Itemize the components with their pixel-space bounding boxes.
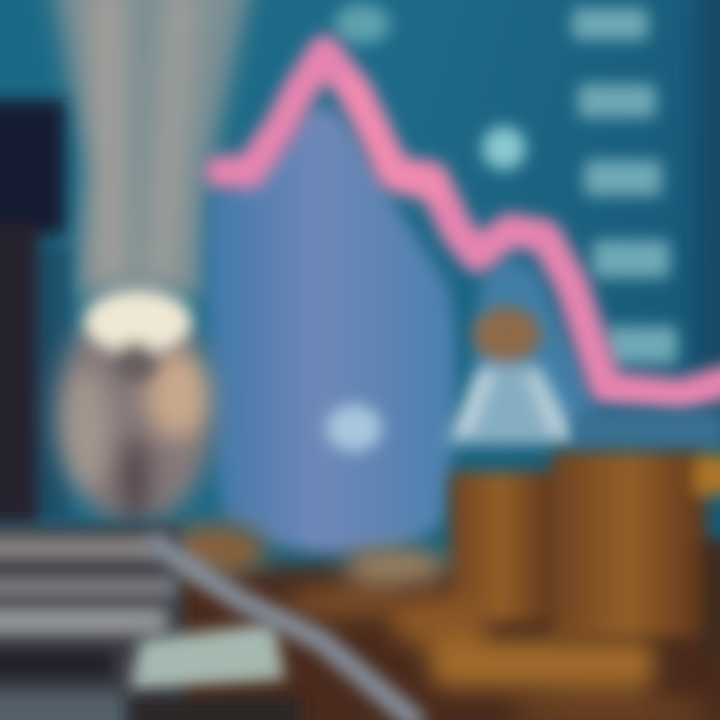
glowing dots in chart [334, 4, 526, 170]
dark desk at bottom [130, 698, 300, 720]
pink falling price line [222, 52, 720, 396]
fallen coins [163, 524, 710, 720]
glass bottle [445, 307, 580, 445]
floor base [170, 565, 720, 720]
pale paper sheet [130, 622, 285, 690]
glow spot on column [326, 404, 382, 452]
diagonal pen [150, 540, 420, 720]
background: dark band at right edge [695, 0, 720, 420]
large blue column [207, 107, 456, 556]
dark tower at left [0, 100, 70, 525]
piggy figure [55, 300, 215, 525]
papers stack at lower left [0, 525, 180, 720]
blue blob behind bottle [470, 260, 600, 430]
grey rays at upper left [50, 0, 255, 300]
ledger tiles at right [572, 8, 678, 364]
blue haze above coins [575, 410, 720, 450]
piggy head highlight [84, 290, 192, 382]
coin stacks [450, 452, 720, 660]
